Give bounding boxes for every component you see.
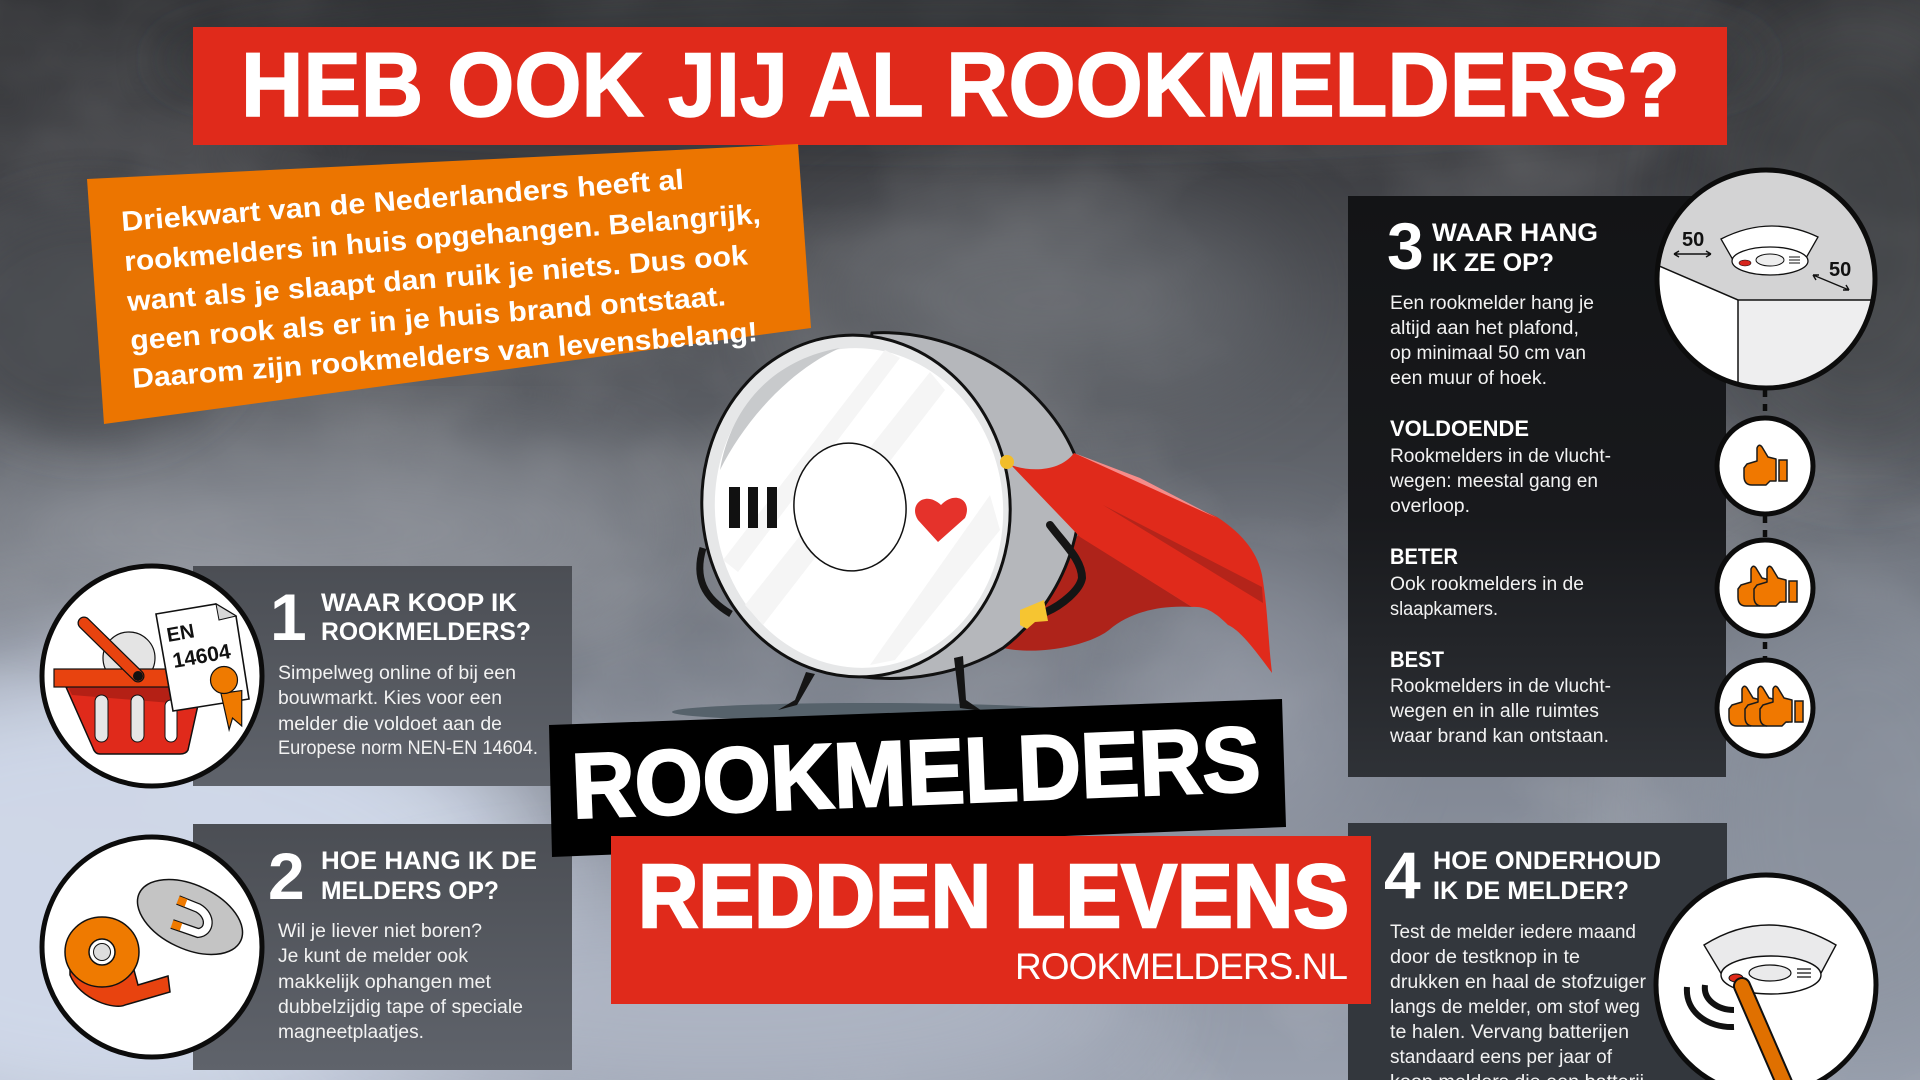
panel 3: waar hang ik ze op: BEST xyxy=(1390,647,1445,672)
right arm and glove xyxy=(1020,525,1082,629)
vent bars xyxy=(729,487,777,528)
panel 4: hoe onderhoud ik de melder: langs de melder, om stof weg xyxy=(1390,997,1640,1018)
panel 4: hoe onderhoud ik de melder: standaard eens per jaar of xyxy=(1390,1047,1613,1068)
panel 2: hoe hang ik de melders op: HOE HANG IK DE xyxy=(321,847,537,875)
panel 1: waar koop ik: melder die voldoet aan de xyxy=(278,714,502,735)
superhero smoke detector mascot xyxy=(672,320,1272,721)
redden levens red banner xyxy=(611,836,1371,1004)
icon: basket and certificate: 14604 xyxy=(171,640,233,673)
panel 3: waar hang ik ze op: wegen en in alle ruimtes xyxy=(1389,701,1599,722)
panel 3: waar hang ik ze op: WAAR HANG xyxy=(1432,219,1598,247)
panel 3: waar hang ik ze op: IK ZE OP? xyxy=(1432,249,1554,277)
legs xyxy=(778,656,982,711)
sensor circle xyxy=(788,437,912,577)
intro callout: want als je slaapt dan ruik je niets. Dus ook xyxy=(125,239,749,317)
panel 3: waar hang ik ze op: altijd aan het plafond, xyxy=(1390,318,1579,339)
panel 4: hoe onderhoud ik de melder: Test de melder iedere maand xyxy=(1390,922,1636,943)
heart xyxy=(915,498,967,542)
intro callout xyxy=(87,144,811,424)
title banner: HEB OOK JIJ AL ROOKMELDERS? xyxy=(241,35,1680,136)
panel 2: hoe hang ik de melders op: magneetplaatjes. xyxy=(278,1022,424,1043)
cape front xyxy=(1011,453,1272,673)
gold clasp xyxy=(1000,455,1014,469)
left arm xyxy=(700,548,731,614)
panel 4: hoe onderhoud ik de melder: door de testknop in te xyxy=(1390,947,1580,968)
panel 3: waar hang ik ze op: een muur of hoek. xyxy=(1390,368,1547,389)
panel 2: hoe hang ik de melders op: makkelijk ophangen met xyxy=(278,972,492,993)
icon: three thumbs xyxy=(1717,660,1813,756)
panel 2: hoe hang ik de melders op: 2 xyxy=(268,839,305,913)
panel 1: waar koop ik: ROOKMELDERS? xyxy=(321,618,531,646)
panel 1: waar koop ik xyxy=(193,566,572,786)
panel 3: waar hang ik ze op: Rookmelders in de vlucht- xyxy=(1390,676,1611,697)
icon: tape and magnet xyxy=(42,837,262,1057)
panel 3: waar hang ik ze op: Een rookmelder hang je xyxy=(1390,293,1594,314)
connector dots xyxy=(1763,390,1767,700)
panel 3: waar hang ik ze op: op minimaal 50 cm van xyxy=(1390,343,1586,364)
panel 3: waar hang ik ze op: overloop. xyxy=(1390,496,1470,517)
icon: testing detector with stick xyxy=(1656,875,1876,1080)
panel 4: hoe onderhoud ik de melder: 4 xyxy=(1384,838,1421,912)
panel 1: waar koop ik: 1 xyxy=(270,580,307,654)
detector face xyxy=(685,320,1027,692)
icon: two thumbs xyxy=(1717,540,1813,636)
panel 3: waar hang ik ze op: 3 xyxy=(1387,209,1424,283)
redden levens red banner: REDDEN LEVENS xyxy=(638,847,1349,947)
panel 3: waar hang ik ze op: Ook rookmelders in de xyxy=(1390,574,1584,595)
panel 3: waar hang ik ze op: waar brand kan ontstaan. xyxy=(1389,726,1609,747)
panel 2: hoe hang ik de melders op: Je kunt de melder ook xyxy=(278,946,468,967)
panel 1: waar koop ik: bouwmarkt. Kies voor een xyxy=(278,688,502,709)
panel 1: waar koop ik: Simpelweg online of bij een xyxy=(278,663,516,684)
panel 3: waar hang ik ze op: wegen: meestal gang en xyxy=(1389,471,1598,492)
panel 3: waar hang ik ze op: VOLDOENDE xyxy=(1390,416,1529,441)
panel 2: hoe hang ik de melders op: Wil je liever niet boren? xyxy=(278,921,482,942)
panel 1: waar koop ik: Europese norm NEN-EN 14604. xyxy=(278,738,538,759)
panel 3: waar hang ik ze op: Rookmelders in de vlucht- xyxy=(1390,446,1611,467)
panel 3: waar hang ik ze op xyxy=(1348,196,1726,777)
panel 4: hoe onderhoud ik de melder: drukken en haal de stofzuiger xyxy=(1390,972,1647,993)
icon: ceiling placement diagram: 50 xyxy=(1682,229,1704,251)
panel 2: hoe hang ik de melders op xyxy=(193,824,572,1070)
panel 4: hoe onderhoud ik de melder: IK DE MELDER? xyxy=(1433,877,1629,905)
panel 4: hoe onderhoud ik de melder xyxy=(1348,823,1727,1080)
icon: basket and certificate xyxy=(42,566,262,786)
intro callout: geen rook als er in je huis brand ontstaat. xyxy=(129,280,727,356)
redden levens red banner: ROOKMELDERS.NL xyxy=(1015,946,1348,987)
rookmelders black banner: ROOKMELDERS xyxy=(570,708,1262,838)
intro callout: Driekwart van de Nederlanders heeft al xyxy=(120,164,685,237)
icon: ceiling placement diagram: 50 xyxy=(1829,259,1851,281)
panel 3: waar hang ik ze op: BETER xyxy=(1390,544,1458,569)
panel 2: hoe hang ik de melders op: MELDERS OP? xyxy=(321,877,499,905)
detector body xyxy=(850,333,1080,678)
panel 4: hoe onderhoud ik de melder: HOE ONDERHOUD xyxy=(1433,847,1661,875)
panel 2: hoe hang ik de melders op: dubbelzijdig tape of speciale xyxy=(278,997,523,1018)
icon: one thumb xyxy=(1717,418,1813,514)
panel 4: hoe onderhoud ik de melder: te halen. Vervang batterijen xyxy=(1390,1022,1629,1043)
icon: ceiling placement diagram xyxy=(1650,165,1880,395)
cape shadow side xyxy=(1003,535,1192,651)
icon: basket and certificate: EN xyxy=(165,620,196,647)
intro callout: rookmelders in huis opgehangen. Belangrijk, xyxy=(123,198,762,277)
intro callout: Daarom zijn rookmelders van levensbelang! xyxy=(131,316,759,394)
panel 1: waar koop ik: WAAR KOOP IK xyxy=(321,589,517,617)
panel 3: waar hang ik ze op: slaapkamers. xyxy=(1390,599,1498,620)
